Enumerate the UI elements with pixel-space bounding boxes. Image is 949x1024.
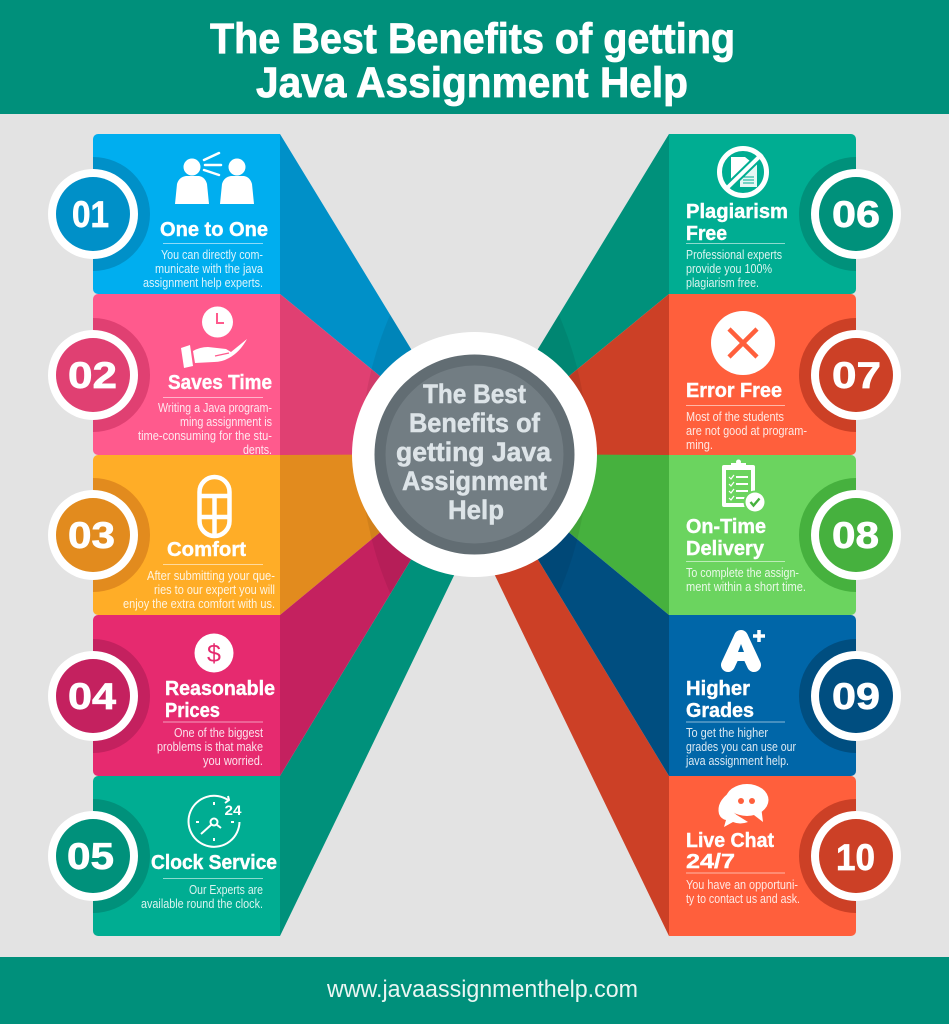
icon: checklist clipboard bbox=[722, 460, 766, 514]
heading: Saves Time bbox=[168, 371, 272, 394]
number badge 09 bbox=[811, 651, 901, 741]
body text: You can directly com- bbox=[161, 248, 263, 262]
icon: 24 hour clock: 24 bbox=[224, 802, 242, 818]
heading: Live Chat bbox=[686, 829, 774, 852]
number badge 06: 06 bbox=[832, 194, 880, 235]
body text: You have an opportuni- bbox=[686, 878, 798, 892]
hub text: Benefits of bbox=[409, 408, 541, 438]
panel: 07 Error Free bbox=[669, 294, 901, 455]
number badge 04: 04 bbox=[68, 676, 116, 717]
body text: are not good at program- bbox=[686, 424, 807, 438]
heading: Clock Service bbox=[151, 851, 277, 874]
icon: no plagiarism bbox=[720, 148, 766, 196]
body text: After submitting your que- bbox=[147, 569, 275, 583]
hub text: getting Java bbox=[396, 437, 552, 467]
number badge 01: 01 bbox=[72, 194, 109, 235]
number badge 02: 02 bbox=[68, 355, 117, 396]
icon: comfort window bbox=[200, 477, 230, 536]
number badge 07: 07 bbox=[832, 355, 881, 396]
icon: error cross bbox=[711, 311, 775, 375]
body text: dents. bbox=[243, 443, 272, 457]
heading: Plagiarism bbox=[686, 200, 788, 223]
heading: On-Time bbox=[686, 515, 766, 538]
title: Java Assignment Help bbox=[256, 59, 688, 107]
heading: Comfort bbox=[167, 538, 246, 561]
number badge 03: 03 bbox=[68, 515, 115, 556]
number badge 07 bbox=[811, 330, 901, 420]
heading: Prices bbox=[165, 699, 220, 722]
body text: Our Experts are bbox=[189, 883, 263, 897]
number badge 02 bbox=[48, 330, 138, 420]
panel: 03 Comfort bbox=[48, 455, 280, 615]
heading: Grades bbox=[686, 699, 754, 722]
icon: dollar coin: $ bbox=[207, 640, 221, 668]
body text: problems is that make bbox=[157, 740, 263, 754]
body text: Most of the students bbox=[686, 410, 784, 424]
panel: 01 One to One bbox=[48, 134, 280, 294]
title: The Best Benefits of getting bbox=[210, 15, 735, 63]
icon: A plus grade bbox=[728, 630, 765, 665]
hub text: Help bbox=[448, 495, 504, 525]
body text: Writing a Java program- bbox=[158, 401, 272, 415]
body text: ty to contact us and ask. bbox=[686, 892, 800, 906]
panel: 09 Higher Grades bbox=[669, 615, 901, 776]
number badge 05 bbox=[48, 811, 138, 901]
heading: Delivery bbox=[686, 537, 765, 560]
hub text: Assignment bbox=[402, 466, 547, 496]
footer band bbox=[0, 957, 949, 1024]
heading: Error Free bbox=[686, 379, 782, 402]
number badge 03 bbox=[48, 490, 138, 580]
body text: ming assignment is bbox=[180, 415, 272, 429]
number badge 01 bbox=[48, 169, 138, 259]
panel: 05 Clock Service bbox=[48, 776, 280, 936]
number badge 08: 08 bbox=[832, 515, 879, 556]
body text: ries to our expert you will bbox=[154, 583, 275, 597]
icon: hand holding clock bbox=[181, 306, 247, 368]
heading: Higher bbox=[686, 677, 750, 700]
hub text: The Best bbox=[423, 379, 526, 409]
number badge 05: 05 bbox=[67, 836, 114, 877]
body text: java assignment help. bbox=[685, 754, 789, 768]
number badge 09: 09 bbox=[832, 676, 880, 717]
heading: Free bbox=[686, 222, 727, 245]
panel: 04 Reasonable Prices bbox=[48, 615, 280, 776]
number badge 10: 10 bbox=[836, 837, 875, 878]
body text: available round the clock. bbox=[141, 897, 263, 911]
panel: 10 Live Chat bbox=[669, 776, 901, 936]
panel: 06 Plagiarism Free bbox=[669, 134, 901, 294]
icon: two people talking bbox=[175, 153, 254, 204]
body text: grades you can use our bbox=[686, 740, 796, 754]
central hub circle bbox=[352, 332, 597, 577]
body text: you worried. bbox=[203, 754, 263, 768]
icon: 24 hour clock bbox=[189, 796, 242, 847]
heading: One to One bbox=[160, 218, 268, 241]
body text: municate with the java bbox=[155, 262, 263, 276]
body text: One of the biggest bbox=[174, 726, 263, 740]
number badge 08 bbox=[811, 490, 901, 580]
icon: chat bubbles bbox=[718, 784, 768, 827]
panel: 08 On-Time Delivery bbox=[669, 455, 901, 615]
body text: ment within a short time. bbox=[686, 580, 806, 594]
body text: To complete the assign- bbox=[686, 566, 799, 580]
body text: To get the higher bbox=[686, 726, 768, 740]
left ribbons bbox=[280, 134, 454, 936]
body text: Professional experts bbox=[686, 248, 782, 262]
panel: 02 Saves Time bbox=[48, 294, 280, 457]
body text: time-consuming for the stu- bbox=[138, 429, 272, 443]
number badge 06 bbox=[811, 169, 901, 259]
body text: provide you 100% bbox=[686, 262, 772, 276]
heading: 24/7 bbox=[686, 850, 735, 873]
website url: www.javaassignmenthelp.com bbox=[326, 976, 638, 1003]
number badge 10 bbox=[811, 811, 901, 901]
body text: assignment help experts. bbox=[143, 276, 263, 290]
number badge 04 bbox=[48, 651, 138, 741]
header band bbox=[0, 0, 949, 114]
heading: Reasonable bbox=[165, 677, 275, 700]
icon: dollar coin bbox=[194, 634, 234, 672]
body text: plagiarism free. bbox=[686, 276, 759, 290]
right ribbons bbox=[494, 134, 669, 936]
body text: ming. bbox=[686, 438, 713, 452]
body text: enjoy the extra comfort with us. bbox=[123, 597, 275, 611]
